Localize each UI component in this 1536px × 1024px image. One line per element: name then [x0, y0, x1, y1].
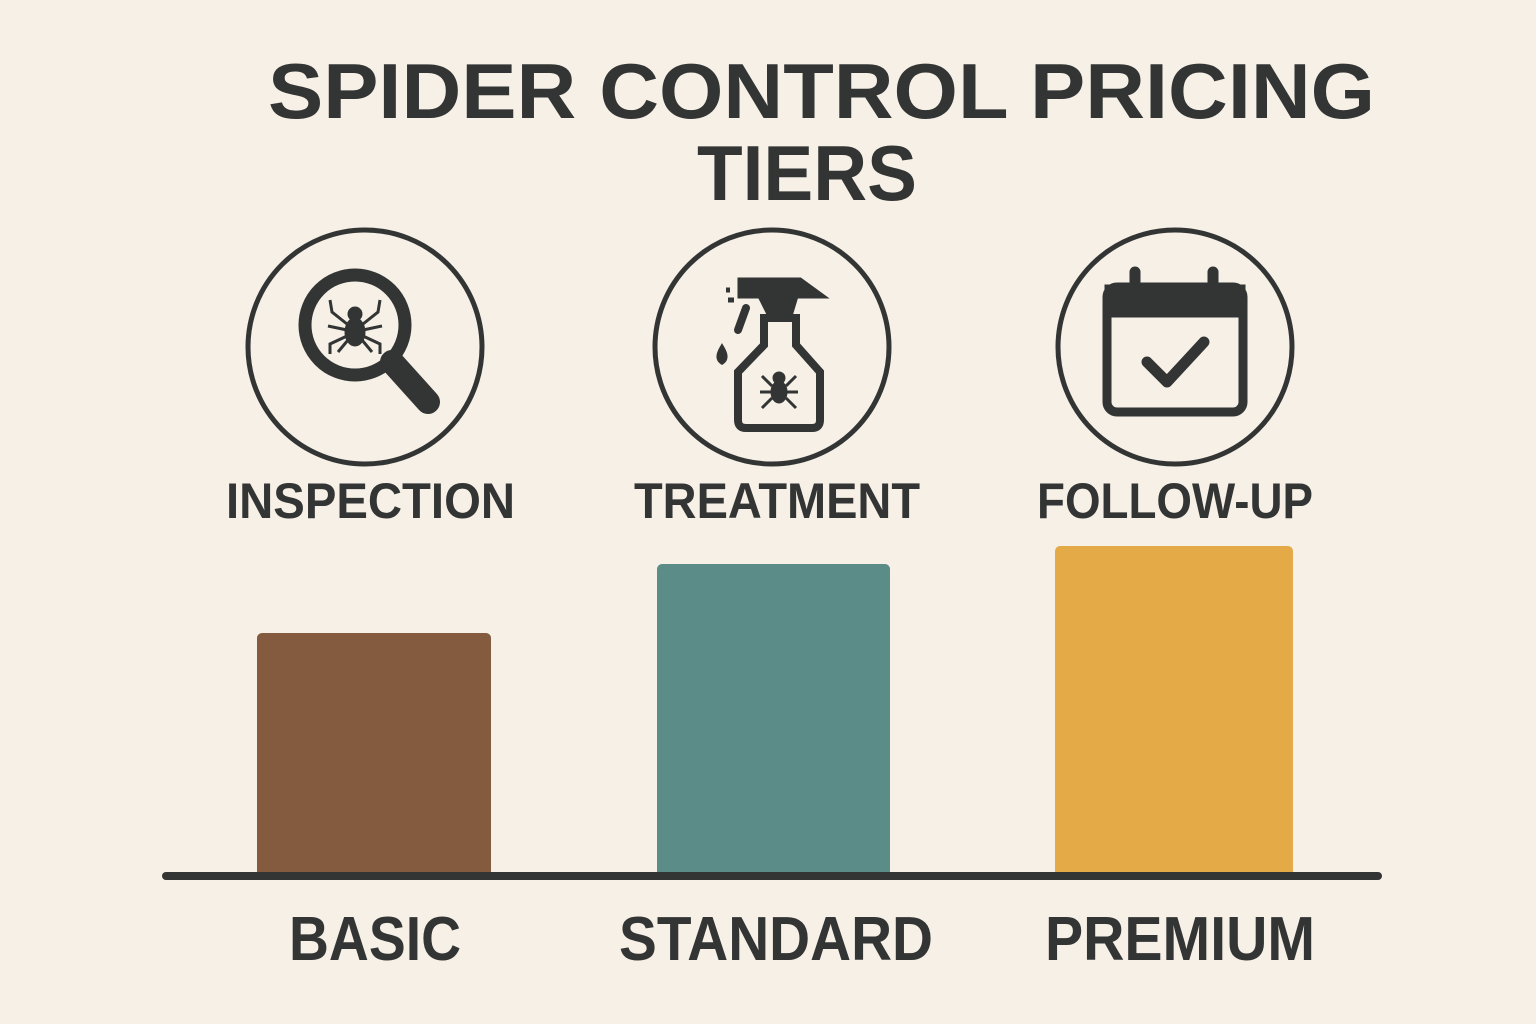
bar: standard	[657, 564, 890, 878]
label: inspection: INSPECTION	[226, 473, 515, 529]
title: TIERS	[697, 129, 917, 217]
title: SPIDER CONTROL PRICING	[268, 47, 1375, 135]
icon: treatment spray bottle	[655, 230, 889, 464]
label: standard: STANDARD	[619, 905, 933, 974]
title	[268, 47, 1375, 217]
label: premium: PREMIUM	[1045, 905, 1315, 974]
bar chart	[166, 546, 1378, 878]
label: treatment: TREATMENT	[634, 473, 920, 529]
bar: basic	[257, 633, 491, 878]
label: basic: BASIC	[289, 905, 461, 974]
bar: premium	[1055, 546, 1293, 878]
icon: inspection magnifier	[248, 230, 482, 464]
label: follow-up: FOLLOW-UP	[1037, 473, 1313, 529]
icon: follow-up calendar	[1058, 230, 1292, 464]
